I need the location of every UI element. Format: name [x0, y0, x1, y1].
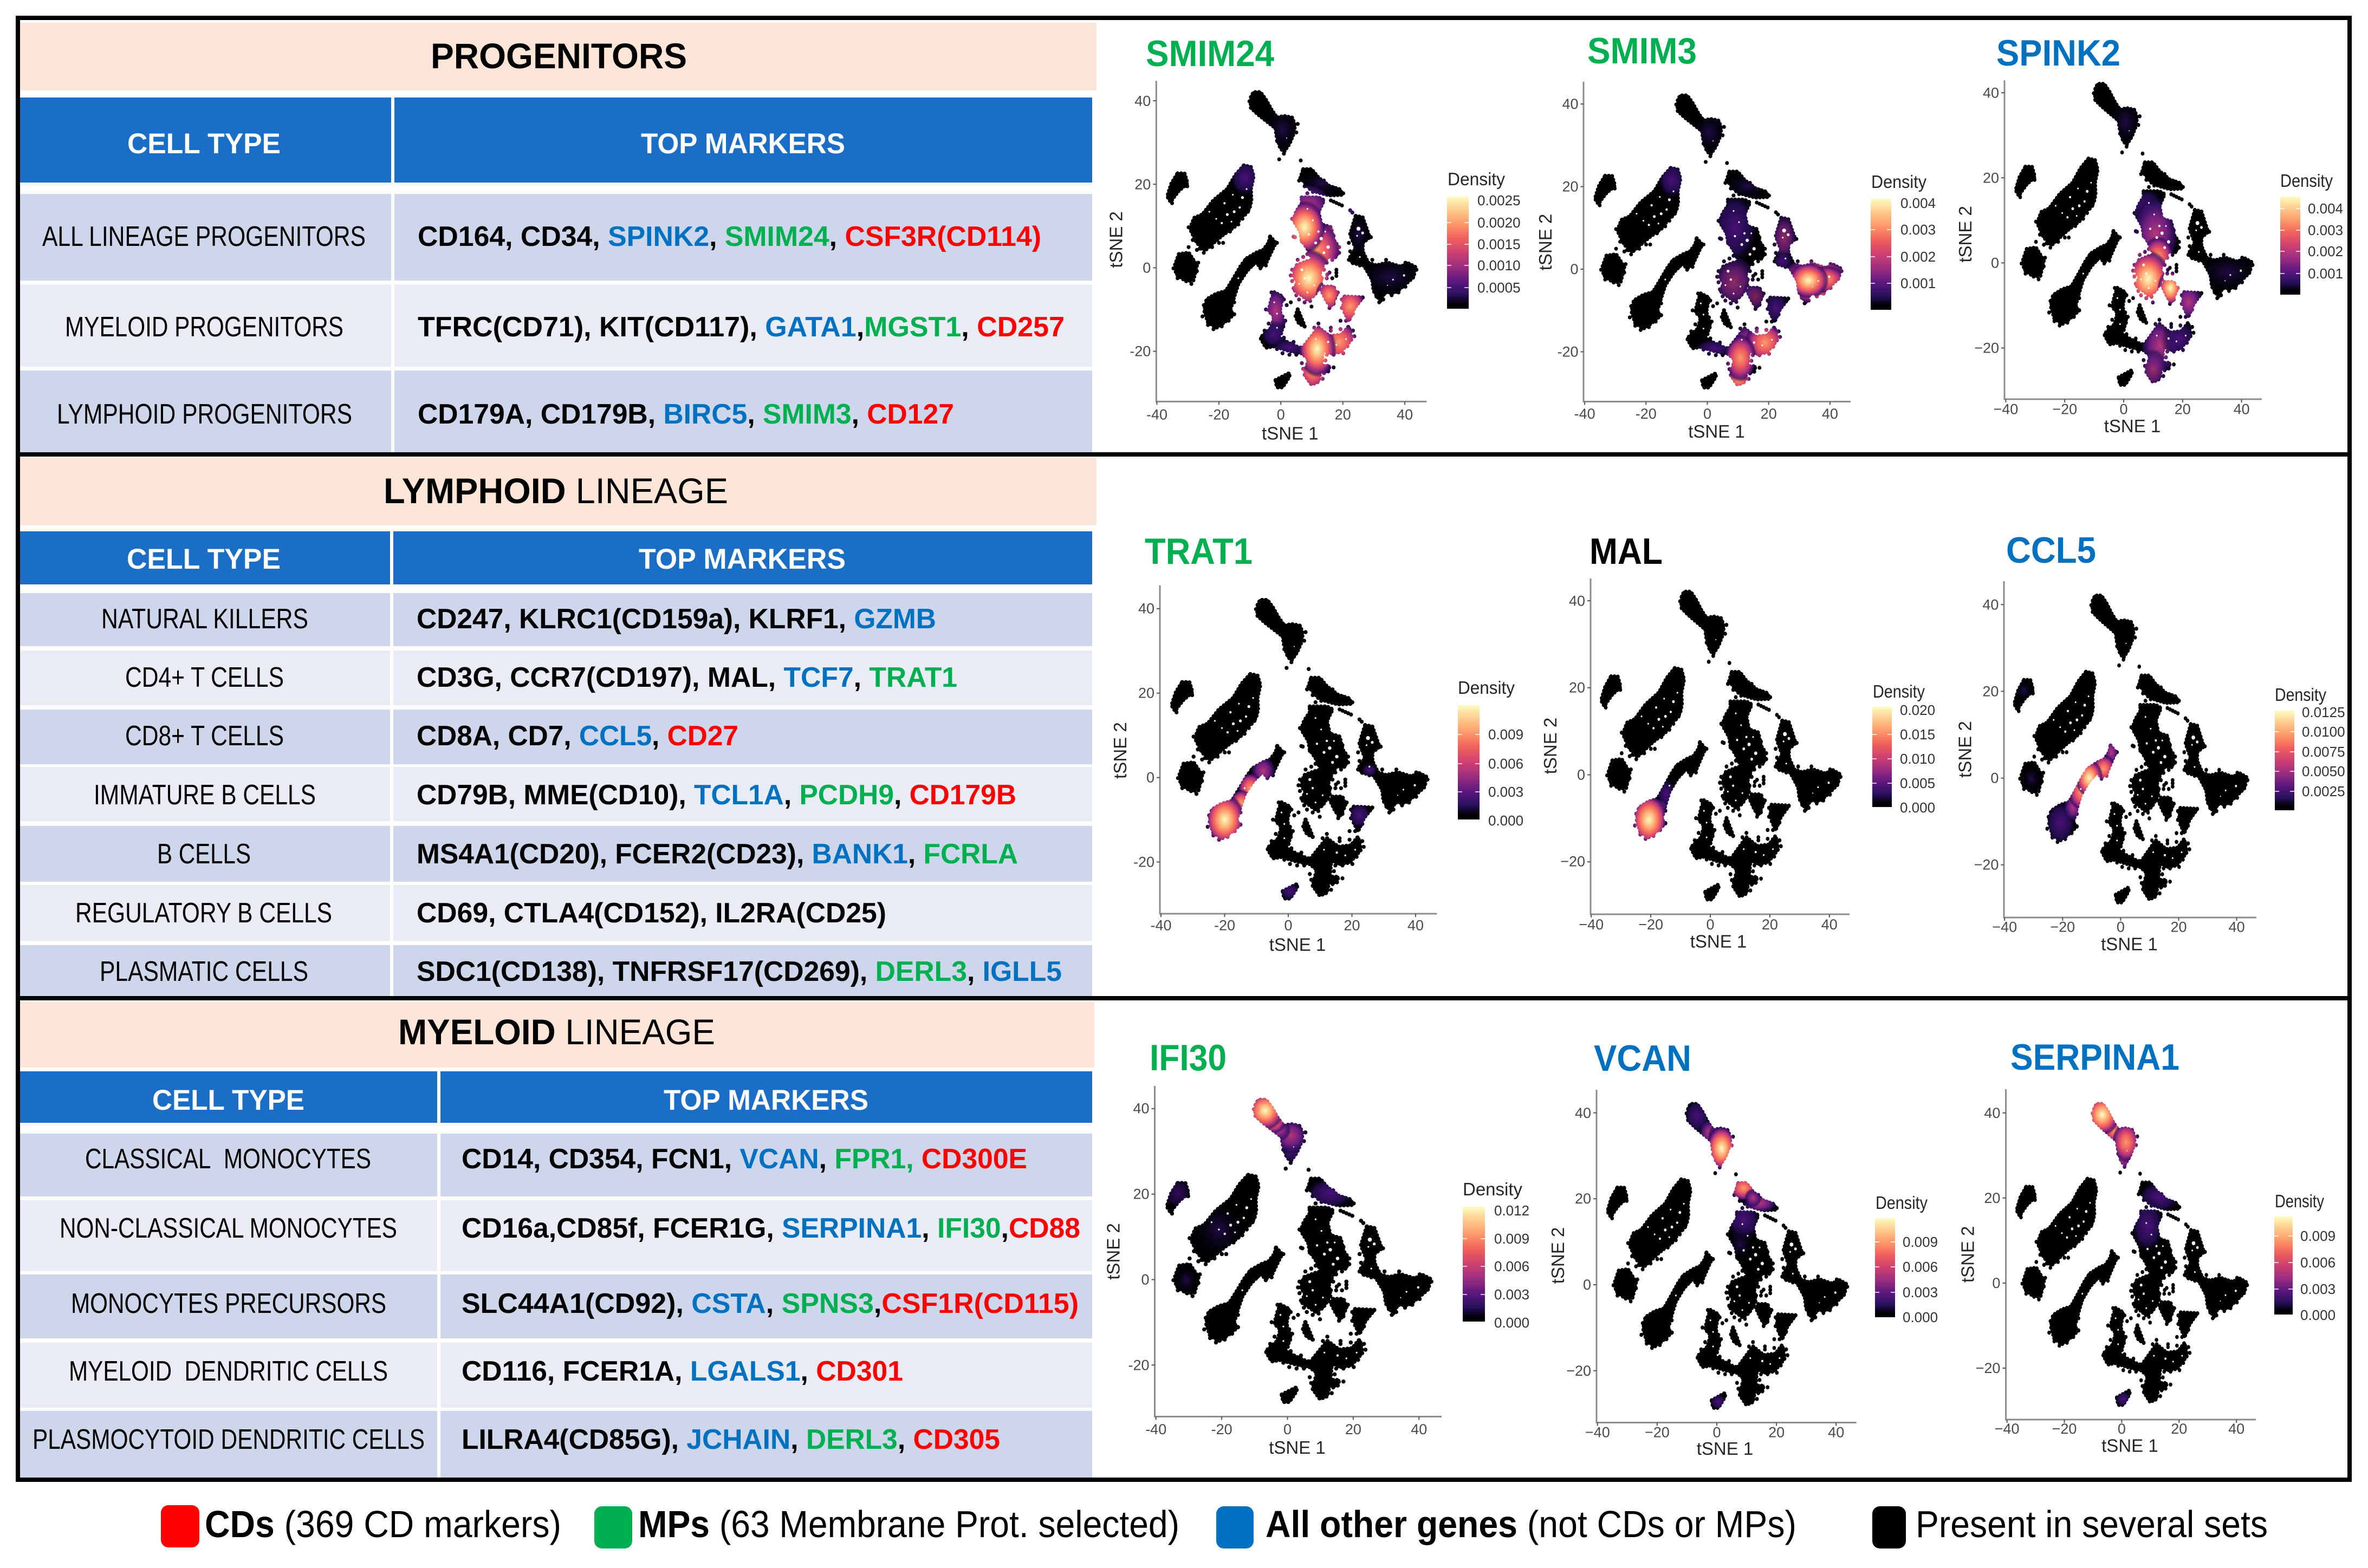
chart title: CCL5	[2006, 530, 2096, 571]
density legend: 0.0025	[1477, 192, 1521, 209]
scatter and axes: 20	[2171, 1421, 2187, 1437]
scatter and axes: 40	[1134, 93, 1151, 109]
scatter and axes: 20	[1982, 684, 1999, 700]
row: B cells: B CELLS	[157, 838, 251, 870]
scatter and axes: 40	[2234, 401, 2250, 417]
legend item: CDs: CDs (369 CD markers)	[205, 1503, 561, 1545]
row: monocytes precursors: MONOCYTES PRECURSORS	[71, 1288, 386, 1319]
chart: VCAN tSNE density	[1548, 1038, 1938, 1459]
row: non-classical monocytes	[20, 1200, 1092, 1271]
table header: TOP MARKERS	[639, 543, 846, 575]
table header: TOP MARKERS	[641, 128, 845, 160]
scatter and axes: −20	[1560, 854, 1585, 870]
density legend	[1463, 1179, 1529, 1331]
density legend: 0.009	[2300, 1228, 2335, 1244]
scatter and axes	[1548, 1090, 1856, 1459]
scatter and axes: 40	[1828, 1424, 1844, 1441]
density legend: 0.009	[1494, 1231, 1529, 1247]
row: regulatory B cells	[20, 885, 1092, 941]
row: myeloid progenitors	[20, 284, 1092, 367]
scatter and axes: −40	[1995, 1421, 2020, 1437]
scatter and axes	[1110, 585, 1437, 955]
scatter and axes: -20	[1214, 918, 1235, 934]
scatter and axes: tSNE 1	[1269, 1437, 1326, 1458]
row: myeloid progenitors: MYELOID PROGENITORS	[65, 311, 343, 343]
table header: TOP MARKERS	[664, 1084, 868, 1116]
density legend: 0.003	[1494, 1286, 1529, 1303]
density legend: 0.0005	[1477, 279, 1521, 296]
scatter and axes: 40	[2229, 919, 2245, 935]
row: non-classical monocytes: NON-CLASSICAL MONOCYTES	[60, 1213, 397, 1244]
scatter and axes: 0	[1577, 767, 1585, 783]
scatter and axes	[1106, 81, 1426, 443]
scatter and axes: 0	[2119, 401, 2128, 417]
scatter and axes: 20	[1768, 1424, 1785, 1441]
scatter and axes: −40	[1579, 916, 1604, 933]
scatter and axes: -20	[1211, 1421, 1232, 1437]
scatter and axes: 20	[1761, 406, 1777, 422]
density legend: 0.003	[1900, 222, 1936, 238]
scatter and axes: tSNE 2	[1955, 206, 1975, 263]
density legend: 0.0020	[1477, 214, 1521, 231]
scatter and axes: tSNE 2	[1548, 1227, 1568, 1284]
density legend: Density	[2275, 685, 2326, 705]
heading: progenitors: PROGENITORS	[431, 36, 687, 76]
row: CD8+ T cells: CD8A, CD7, CCL5, CD27	[417, 720, 738, 752]
chart title: IFI30	[1150, 1037, 1227, 1078]
density legend	[1458, 678, 1523, 829]
row: plasmatic cells	[20, 945, 1092, 996]
row: classical monocytes: CLASSICAL MONOCYTES	[85, 1143, 371, 1175]
scatter and axes: -20	[1130, 343, 1151, 359]
density legend: 0.009	[1903, 1234, 1938, 1250]
scatter and axes: 0	[1277, 406, 1285, 422]
density legend: Density	[1873, 681, 1925, 701]
density legend	[1871, 172, 1936, 310]
scatter and axes: 40	[1411, 1421, 1427, 1437]
density legend	[1872, 681, 1935, 816]
scatter and axes: tSNE 1	[1688, 421, 1745, 441]
row: all lineage progenitors: CD164, CD34, SPINK2, SMIM24, CSF3R(CD114)	[418, 221, 1041, 252]
scatter and axes: -40	[1150, 918, 1172, 934]
density legend: Density	[1871, 172, 1926, 192]
row: all lineage progenitors	[20, 194, 1092, 281]
density legend	[2274, 1191, 2335, 1323]
scatter and axes: 20	[1984, 1190, 2000, 1206]
density legend: 0.006	[1488, 756, 1523, 772]
scatter and axes: 0	[1143, 259, 1151, 276]
scatter and axes: 0	[1583, 1277, 1591, 1293]
scatter and axes: tSNE 2	[1110, 722, 1130, 779]
density legend	[1447, 169, 1521, 309]
scatter and axes	[1540, 578, 1850, 951]
density legend: 0.000	[1903, 1309, 1938, 1325]
panel: lymphoid lineage table	[20, 458, 1097, 996]
scatter and axes: 20	[1562, 179, 1579, 195]
scatter and axes: -40	[1574, 406, 1595, 422]
density legend: 0.002	[2308, 243, 2343, 259]
scatter and axes: 0	[1712, 1424, 1721, 1441]
chart title: SERPINA1	[2010, 1037, 2179, 1078]
row: plasmocytoid dendritic cells	[20, 1411, 1092, 1478]
scatter and axes: 20	[1344, 918, 1360, 934]
scatter and axes: 20	[1762, 916, 1778, 933]
density legend: 0.0015	[1477, 236, 1521, 252]
row: natural killers	[20, 593, 1092, 646]
density legend: Density	[1458, 678, 1515, 698]
density legend: Density	[1448, 169, 1505, 189]
scatter and axes: −20	[1976, 1360, 2000, 1376]
scatter and axes: 0	[1283, 1421, 1292, 1437]
row: myeloid dendritic cells: CD116, FCER1A, LGALS1, CD301	[462, 1356, 903, 1387]
density legend: 0.0050	[2302, 763, 2345, 779]
scatter and axes: -20	[1208, 406, 1229, 422]
row: myeloid progenitors: TFRC(CD71), KIT(CD117), GATA1,MGST1, CD257	[418, 311, 1065, 343]
panel: progenitors table	[20, 23, 1097, 453]
density legend: 0.001	[2308, 265, 2343, 282]
scatter and axes: 0	[1990, 770, 1999, 786]
row: CD8+ T cells: CD8+ T CELLS	[125, 720, 284, 752]
row: CD8+ T cells	[20, 710, 1092, 764]
scatter and axes: tSNE 1	[1269, 935, 1326, 955]
row: natural killers: CD247, KLRC1(CD159a), KLRF1, GZMB	[417, 603, 936, 635]
scatter and axes: 20	[1138, 685, 1154, 701]
density legend	[2280, 171, 2343, 295]
scatter and axes: 40	[1983, 84, 1999, 101]
scatter and axes: 20	[2175, 401, 2191, 417]
density legend: 0.0125	[2302, 704, 2345, 720]
density legend: Density	[1463, 1179, 1522, 1199]
scatter and axes: −20	[2050, 919, 2075, 935]
scatter and axes: 0	[1284, 918, 1293, 934]
scatter and axes: −20	[1974, 340, 1999, 356]
scatter and axes: −20	[1638, 916, 1663, 933]
density legend: 0.006	[1903, 1259, 1938, 1275]
row: B cells	[20, 826, 1092, 882]
legend	[161, 1503, 2268, 1549]
scatter and axes: 40	[1562, 96, 1579, 112]
scatter and axes: 40	[2228, 1421, 2244, 1437]
scatter and axes: 0	[1146, 770, 1154, 786]
scatter and axes: 0	[1991, 255, 1999, 271]
scatter and axes: tSNE 1	[2104, 416, 2161, 436]
scatter and axes	[1103, 1086, 1442, 1458]
density legend: 0.006	[1494, 1258, 1529, 1274]
chart title: VCAN	[1594, 1038, 1691, 1079]
chart: SMIM3 tSNE density	[1535, 30, 1936, 441]
legend item: MPs: MPs (63 Membrane Prot. selected)	[638, 1503, 1179, 1545]
chart: TRAT1 tSNE density	[1110, 531, 1523, 955]
row: monocytes precursors: SLC44A1(CD92), CSTA, SPNS3,CSF1R(CD115)	[462, 1288, 1079, 1319]
row: lymphoid progenitors: CD179A, CD179B, BIRC5, SMIM3, CD127	[418, 399, 954, 430]
row: all lineage progenitors: ALL LINEAGE PROGENITORS	[42, 221, 366, 252]
chart: IFI30 tSNE density	[1103, 1037, 1529, 1458]
scatter and axes: 20	[1133, 1186, 1150, 1202]
scatter and axes: -20	[1128, 1357, 1150, 1374]
scatter and axes: −20	[1566, 1363, 1591, 1379]
chart title: SMIM3	[1587, 30, 1697, 71]
density legend: 0.000	[1488, 812, 1523, 829]
scatter and axes: 20	[2170, 919, 2187, 935]
scatter and axes: tSNE 1	[2101, 934, 2158, 954]
scatter and axes: tSNE 1	[2101, 1436, 2158, 1456]
row: CD4+ T cells	[20, 650, 1092, 705]
density legend: 0.003	[2308, 222, 2343, 238]
scatter and axes: tSNE 2	[1103, 1223, 1124, 1280]
panel: myeloid lineage table	[20, 1002, 1094, 1478]
row: immature B cells: CD79B, MME(CD10), TCL1A, PCDH9, CD179B	[417, 779, 1016, 811]
row: plasmatic cells: SDC1(CD138), TNFRSF17(CD269), DERL3, IGLL5	[417, 956, 1062, 987]
row: CD4+ T cells: CD3G, CCR7(CD197), MAL, TCF7, TRAT1	[417, 662, 957, 693]
scatter and axes: 40	[1822, 406, 1838, 422]
scatter and axes: 20	[1569, 679, 1585, 695]
row: immature B cells	[20, 767, 1092, 821]
legend item: present in several sets: Present in several sets	[1916, 1503, 2268, 1545]
scatter and axes: tSNE 1	[1262, 423, 1319, 443]
density legend: 0.020	[1900, 702, 1935, 718]
scatter and axes: -40	[1146, 406, 1167, 422]
density legend: 0.004	[1900, 195, 1936, 211]
scatter and axes: 0	[1703, 406, 1711, 422]
scatter and axes: tSNE 2	[1535, 214, 1555, 270]
scatter and axes: −20	[1974, 857, 1999, 873]
row: classical monocytes: CD14, CD354, FCN1, VCAN, FPR1, CD300E	[462, 1143, 1027, 1175]
heading: myeloid lineage: MYELOID LINEAGE	[398, 1012, 715, 1052]
density legend: Density	[1876, 1193, 1928, 1213]
density legend	[2275, 685, 2345, 810]
scatter and axes: -20	[1133, 854, 1154, 870]
scatter and axes: 40	[1575, 1105, 1591, 1121]
scatter and axes: −20	[2052, 1421, 2077, 1437]
density legend: 0.000	[2300, 1307, 2335, 1323]
density legend: 0.000	[1900, 799, 1935, 816]
row: plasmocytoid dendritic cells: LILRA4(CD85G), JCHAIN, DERL3, CD305	[462, 1424, 1000, 1455]
row: lymphoid progenitors	[20, 370, 1092, 453]
density legend: 0.015	[1900, 726, 1935, 743]
scatter and axes: 40	[1407, 918, 1424, 934]
row: plasmatic cells: PLASMATIC CELLS	[100, 956, 308, 987]
density legend: 0.003	[1488, 784, 1523, 800]
scatter and axes	[1957, 1089, 2256, 1456]
row: non-classical monocytes: CD16a,CD85f, FCER1G, SERPINA1, IFI30,CD88	[462, 1213, 1080, 1244]
scatter and axes: 0	[1706, 916, 1715, 933]
scatter and axes: 0	[1141, 1272, 1150, 1288]
scatter and axes: 40	[1397, 406, 1413, 422]
scatter and axes: −20	[2052, 401, 2077, 417]
scatter and axes: 40	[1821, 916, 1838, 933]
row: classical monocytes	[20, 1134, 1092, 1196]
density legend: 0.006	[2300, 1254, 2335, 1271]
density legend: 0.0010	[1477, 257, 1521, 274]
row: plasmocytoid dendritic cells: PLASMOCYTOID DENDRITIC CELLS	[33, 1424, 425, 1455]
scatter and axes: 40	[1138, 601, 1154, 617]
chart title: SMIM24	[1146, 33, 1274, 74]
row: myeloid dendritic cells	[20, 1343, 1092, 1408]
scatter and axes	[1535, 82, 1854, 441]
density legend: 0.010	[1900, 751, 1935, 767]
row: natural killers: NATURAL KILLERS	[101, 603, 308, 635]
scatter and axes: 0	[1570, 261, 1579, 277]
row: B cells: MS4A1(CD20), FCER2(CD23), BANK1, FCRLA	[417, 838, 1018, 870]
density legend: 0.0075	[2302, 744, 2345, 760]
scatter and axes: −40	[1585, 1424, 1610, 1441]
scatter and axes: 0	[2118, 1421, 2126, 1437]
row: monocytes precursors	[20, 1274, 1092, 1338]
scatter and axes: −40	[1993, 401, 2018, 417]
chart: SMIM24 tSNE density	[1106, 33, 1521, 443]
scatter and axes: tSNE 1	[1697, 1439, 1753, 1459]
scatter and axes: 40	[1133, 1101, 1150, 1117]
scatter and axes: -20	[1636, 406, 1657, 422]
density legend: 0.004	[2308, 200, 2343, 217]
scatter and axes: 0	[1992, 1275, 2000, 1291]
density legend: 0.0100	[2302, 724, 2345, 740]
row: myeloid dendritic cells: MYELOID DENDRITIC CELLS	[69, 1356, 388, 1387]
density legend: 0.009	[1488, 726, 1523, 743]
density legend: 0.000	[1494, 1315, 1529, 1331]
table header: CELL TYPE	[152, 1084, 304, 1116]
scatter and axes: tSNE 2	[1540, 718, 1560, 774]
scatter and axes: −40	[1992, 919, 2017, 935]
density legend: 0.003	[2300, 1281, 2335, 1297]
density legend: 0.001	[1900, 275, 1936, 291]
scatter and axes	[1955, 80, 2262, 436]
scatter and axes: -20	[1557, 343, 1579, 360]
table header	[20, 1071, 1092, 1123]
density legend	[1875, 1193, 1938, 1325]
row: CD4+ T cells: CD4+ T CELLS	[125, 662, 284, 693]
row: lymphoid progenitors: LYMPHOID PROGENITORS	[57, 399, 352, 430]
row: immature B cells: IMMATURE B CELLS	[94, 779, 316, 811]
chart title: MAL	[1590, 531, 1663, 572]
heading: lymphoid lineage: LYMPHOID LINEAGE	[384, 471, 728, 511]
chart title: SPINK2	[1996, 32, 2120, 74]
legend item: all other genes: All other genes (not CDs or MPs)	[1266, 1503, 1796, 1545]
density legend: Density	[2280, 171, 2333, 191]
heading: lymphoid lineage	[20, 458, 1097, 525]
chart: SERPINA1 tSNE density	[1957, 1037, 2335, 1456]
chart: CCL5 tSNE density	[1955, 530, 2345, 954]
density legend: 0.002	[1900, 249, 1936, 265]
scatter and axes: 20	[1134, 176, 1151, 192]
scatter and axes: 20	[1575, 1190, 1591, 1207]
row: regulatory B cells: REGULATORY B CELLS	[75, 897, 332, 929]
scatter and axes: 20	[1983, 170, 1999, 186]
chart: SPINK2 tSNE density	[1955, 32, 2343, 436]
density legend: Density	[2275, 1191, 2324, 1211]
table header	[20, 97, 1092, 183]
table header: CELL TYPE	[127, 128, 281, 160]
scatter and axes: tSNE 2	[1955, 721, 1975, 778]
scatter and axes: 20	[1335, 406, 1351, 422]
density legend: 0.005	[1900, 775, 1935, 791]
table header: CELL TYPE	[127, 543, 281, 575]
scatter and axes: tSNE 2	[1106, 211, 1126, 268]
density legend: 0.003	[1903, 1284, 1938, 1300]
scatter and axes: tSNE 1	[1690, 932, 1747, 951]
scatter and axes: tSNE 2	[1957, 1226, 1977, 1283]
density legend: 0.012	[1494, 1202, 1529, 1219]
table header	[20, 531, 1092, 584]
heading: myeloid lineage	[20, 1002, 1094, 1068]
chart: MAL tSNE density	[1540, 531, 1935, 951]
chart title: TRAT1	[1145, 531, 1253, 572]
scatter and axes: 0	[2117, 919, 2125, 935]
scatter and axes	[1955, 581, 2256, 954]
scatter and axes: 40	[1982, 597, 1999, 613]
scatter and axes: 20	[1345, 1421, 1361, 1437]
heading: progenitors	[20, 23, 1097, 90]
scatter and axes: -40	[1145, 1421, 1166, 1437]
row: regulatory B cells: CD69, CTLA4(CD152), IL2RA(CD25)	[417, 897, 886, 929]
scatter and axes: 40	[1569, 593, 1585, 609]
scatter and axes: 40	[1984, 1105, 2000, 1121]
density legend: 0.0025	[2302, 783, 2345, 799]
scatter and axes: −20	[1645, 1424, 1670, 1441]
